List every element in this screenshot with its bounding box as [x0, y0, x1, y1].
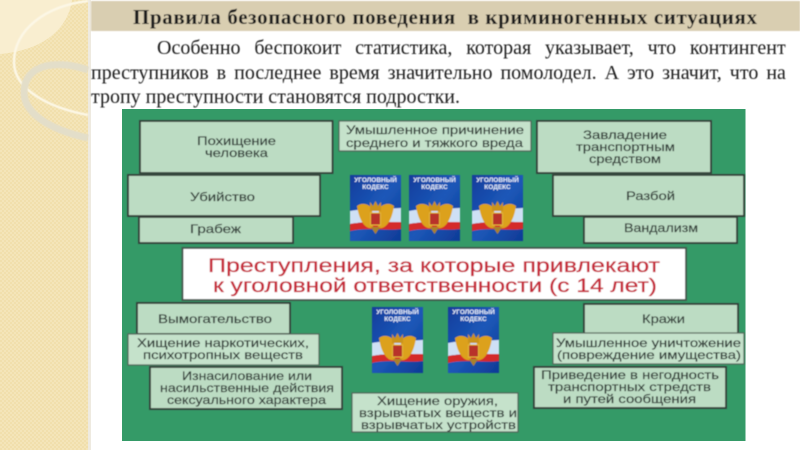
box: Изнасилование: [150, 367, 342, 409]
title: Правила безопасного поведения в криминогенных ситуациях: [133, 5, 758, 29]
box: Умышленное причинение: [339, 121, 531, 151]
box: Вымогательство: [137, 303, 290, 334]
box: Хищение оружия: Хищение оружия,: [377, 394, 498, 408]
box: Вандализм: Вандализм: [624, 221, 698, 235]
box: Умышленное уничтожение: [553, 333, 744, 364]
icon: code book 2: [409, 175, 460, 241]
icon: code book 1: КОДЕКС: [362, 184, 389, 191]
box: Завладение транспортным средством: [537, 121, 711, 173]
paragraph text: тропу преступности становятся подростки.: [91, 86, 460, 108]
icon: code book 3: УГОЛОВНЫЙ: [476, 175, 519, 184]
box: Приведение в негодность: транспортных стредств: [548, 380, 711, 394]
background: decorated left sidebar: [0, 0, 91, 450]
icon: code book 5: УГОЛОВНЫЙ: [452, 307, 495, 316]
box: Похищение человека: Похищение: [197, 134, 276, 148]
paragraph text: [91, 37, 786, 108]
box: Завладение транспортным средством: средством: [589, 152, 661, 166]
icon: code book 2: УГОЛОВНЫЙ: [413, 175, 456, 184]
callout: central heading: [182, 248, 686, 300]
icon: code book 3: [472, 175, 523, 241]
box: Хищение наркотических: [128, 334, 319, 365]
box: Умышленное причинение: среднего и тяжкого вреда: [346, 136, 523, 150]
paragraph text: преступников в последнее время значительно помолодел. А это значит, что на: [91, 62, 786, 84]
box: Похищение человека: человека: [205, 146, 268, 160]
callout: central heading: к уголовной ответственности (с 14 лет): [213, 276, 657, 297]
box: Похищение человека: [140, 121, 332, 173]
box: Разбой: [553, 175, 744, 216]
box: Грабеж: Грабеж: [190, 222, 241, 236]
box: Разбой: Разбой: [626, 189, 675, 203]
icon: code book 4: [372, 307, 423, 373]
icon: code book 5: КОДЕКС: [460, 316, 487, 323]
box: Приведение в негодность: и путей сообщения: [563, 392, 696, 406]
paragraph text: Особенно беспокоит статистика, которая указывает, что контингент: [157, 37, 786, 59]
decoration: thin ring: [14, 1, 88, 115]
box: Вымогательство: Вымогательство: [158, 312, 272, 326]
box: Кражи: Кражи: [642, 312, 685, 326]
box: Изнасилование: насильственные действия: [160, 381, 334, 395]
box: Умышленное причинение: Умышленное причинение: [346, 123, 524, 137]
icon: code book 2: КОДЕКС: [421, 184, 448, 191]
icon: code book 3: КОДЕКС: [484, 184, 511, 191]
title bar: [91, 1, 800, 31]
icon: code book 4: УГОЛОВНЫЙ: [376, 307, 419, 316]
box: Вандализм: [584, 217, 737, 243]
box: Кражи: [584, 304, 738, 335]
box: Изнасилование: сексуального характера: [167, 393, 326, 407]
box: Завладение транспортным средством: Завладение: [583, 128, 667, 142]
icon: code book 1: [350, 175, 401, 241]
callout: central heading: Преступления, за которые привлекают: [208, 256, 660, 277]
box: Хищение оружия: [352, 393, 518, 432]
box: Умышленное уничтожение: Умышленное уничтожение: [556, 336, 741, 350]
box: Хищение наркотических: психотропных веществ: [143, 348, 303, 362]
box: Хищение наркотических: Хищение наркотических,: [137, 336, 309, 350]
icon: code book 5: [448, 307, 499, 373]
decoration: pale leaf: [0, 0, 72, 54]
box: Завладение транспортным средством: транспортным: [576, 140, 675, 154]
panel: crimes diagram: [122, 109, 746, 441]
box: Приведение в негодность: Приведение в негодность: [541, 368, 719, 382]
icon: code book 1: УГОЛОВНЫЙ: [354, 175, 397, 184]
box: Убийство: [128, 175, 320, 216]
box: Грабеж: [139, 217, 293, 243]
box: Убийство: Убийство: [190, 190, 255, 204]
decoration: thick ring: [24, 65, 88, 138]
box: Умышленное уничтожение: (повреждение имущества): [557, 348, 741, 362]
box: Хищение оружия: взрывчатых веществ и: [359, 406, 517, 420]
box: Приведение в негодность: [534, 367, 726, 408]
box: Изнасилование: Изнасилование или: [182, 369, 312, 383]
box: Хищение оружия: взрывчатых устройств: [361, 418, 516, 432]
icon: code book 4: КОДЕКС: [384, 316, 411, 323]
